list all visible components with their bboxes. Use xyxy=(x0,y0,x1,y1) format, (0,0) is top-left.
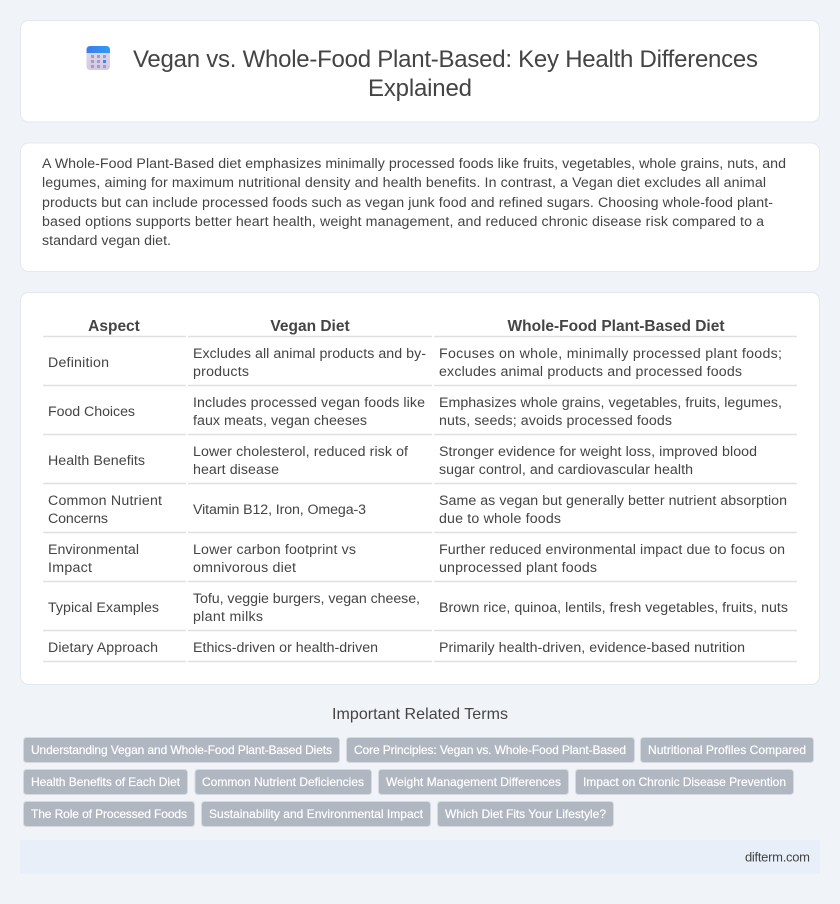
row: dietary approach xyxy=(43,640,797,662)
chip xyxy=(202,802,430,826)
row: health benefits: Lower cholesterol, reduced risk of xyxy=(193,444,408,460)
row: definition: excludes animal products and processed foods xyxy=(439,364,742,380)
heading: related terms: Important Related Terms xyxy=(332,706,508,723)
chip: Health Benefits of Each Diet xyxy=(31,775,181,789)
row: common nutrient concerns: Same as vegan but generally better nutrient absorption xyxy=(439,493,787,509)
title: Explained xyxy=(368,75,472,102)
title: Vegan vs. Whole-Food Plant-Based: Key Health Differences xyxy=(133,46,758,73)
chip: Sustainability and Environmental Impact xyxy=(209,807,424,821)
chip: Understanding Vegan and Whole-Food Plant-Based Diets xyxy=(31,743,332,757)
row: dietary approach: Primarily health-driven, evidence-based nutrition xyxy=(439,640,745,656)
row: food choices: nuts, seeds; avoids processed foods xyxy=(439,413,672,429)
text block: summary paragraph: A Whole-Food Plant-Based diet emphasizes minimally processed foods like fruits, vegetables, whole grains, nuts, and xyxy=(42,156,786,172)
chip xyxy=(438,802,614,826)
row: dietary approach: Ethics-driven or health-driven xyxy=(193,640,378,656)
chip xyxy=(24,738,340,762)
chip xyxy=(24,802,194,826)
row: environmental impact xyxy=(43,542,797,582)
chip xyxy=(24,770,188,794)
text block: summary paragraph xyxy=(42,156,786,249)
row: common nutrient concerns: due to whole foods xyxy=(439,511,561,527)
footer source text: difterm.com xyxy=(745,850,810,864)
row: typical examples xyxy=(43,591,797,630)
table header: Aspect xyxy=(88,318,140,335)
row: environmental impact: omnivorous diet xyxy=(193,560,296,576)
row: dietary approach: Dietary Approach xyxy=(48,640,158,656)
chip xyxy=(195,770,372,794)
row: food choices: faux meats, vegan cheeses xyxy=(193,413,367,429)
row: typical examples: plant milks xyxy=(193,609,263,625)
panel: comparison table xyxy=(20,292,820,684)
related term chips xyxy=(24,738,814,826)
chip xyxy=(640,738,814,762)
text block: summary paragraph: standard vegan diet. xyxy=(42,233,171,249)
chip: The Role of Processed Foods xyxy=(31,807,187,821)
row: health benefits xyxy=(43,444,797,484)
row: food choices: Includes processed vegan foods like xyxy=(193,395,425,411)
row: definition: products xyxy=(193,364,249,380)
footer xyxy=(20,840,820,874)
row: food choices xyxy=(43,395,797,434)
chip: Core Principles: Vegan vs. Whole-Food Plant-Based xyxy=(354,743,626,757)
row: food choices: Emphasizes whole grains, vegetables, fruits, legumes, xyxy=(439,395,782,411)
title xyxy=(133,46,758,102)
panel: summary xyxy=(20,143,820,272)
row: definition: Definition xyxy=(48,355,109,371)
text block: summary paragraph: based options supports better heart health, weight management, and reduced chronic disease risk compared to a xyxy=(42,214,764,230)
text block: summary paragraph: products but can include processed foods such as vegan junk food and refined sugars. Choosing whole-food plant- xyxy=(42,195,773,211)
chip xyxy=(378,770,568,794)
table header xyxy=(43,318,797,336)
row: environmental impact: Impact xyxy=(48,560,92,576)
row: health benefits: heart disease xyxy=(193,462,279,478)
chip: Which Diet Fits Your Lifestyle? xyxy=(445,807,606,821)
row: common nutrient concerns xyxy=(43,493,797,532)
text block: summary paragraph: legumes, aiming for maximum nutritional density and health benefits. In contrast, a Vegan diet excludes all animal xyxy=(42,175,766,191)
row: definition: Excludes all animal products and by- xyxy=(193,346,426,362)
table header: Vegan Diet xyxy=(270,318,350,335)
chip: Nutritional Profiles Compared xyxy=(648,743,806,757)
row: food choices: Food Choices xyxy=(48,404,135,420)
row: typical examples: Tofu, veggie burgers, vegan cheese, xyxy=(193,591,420,607)
row: health benefits: sugar control, and cardiovascular health xyxy=(439,462,693,478)
row: common nutrient concerns: Concerns xyxy=(48,511,108,527)
row: common nutrient concerns: Vitamin B12, Iron, Omega-3 xyxy=(193,502,366,518)
row: common nutrient concerns: Common Nutrient xyxy=(48,493,162,509)
row: health benefits: Health Benefits xyxy=(48,453,145,469)
chip xyxy=(576,770,794,794)
chip xyxy=(346,738,634,762)
row: health benefits: Stronger evidence for weight loss, improved blood xyxy=(439,444,757,460)
row: environmental impact: unprocessed plant foods xyxy=(439,560,597,576)
chip: Weight Management Differences xyxy=(386,775,561,789)
row: definition: Focuses on whole, minimally processed plant foods; xyxy=(439,346,782,362)
row: definition xyxy=(43,346,797,386)
chip: Common Nutrient Deficiencies xyxy=(202,775,364,789)
row: environmental impact: Environmental xyxy=(48,542,139,558)
table header: Whole-Food Plant-Based Diet xyxy=(508,318,724,335)
icon: calendar xyxy=(86,46,110,70)
panel: header xyxy=(20,20,820,122)
row: environmental impact: Lower carbon footprint vs xyxy=(193,542,356,558)
row: environmental impact: Further reduced environmental impact due to focus on xyxy=(439,542,785,558)
row: typical examples: Typical Examples xyxy=(48,600,159,616)
row: typical examples: Brown rice, quinoa, lentils, fresh vegetables, fruits, nuts xyxy=(439,600,788,616)
chip: Impact on Chronic Disease Prevention xyxy=(583,775,786,789)
